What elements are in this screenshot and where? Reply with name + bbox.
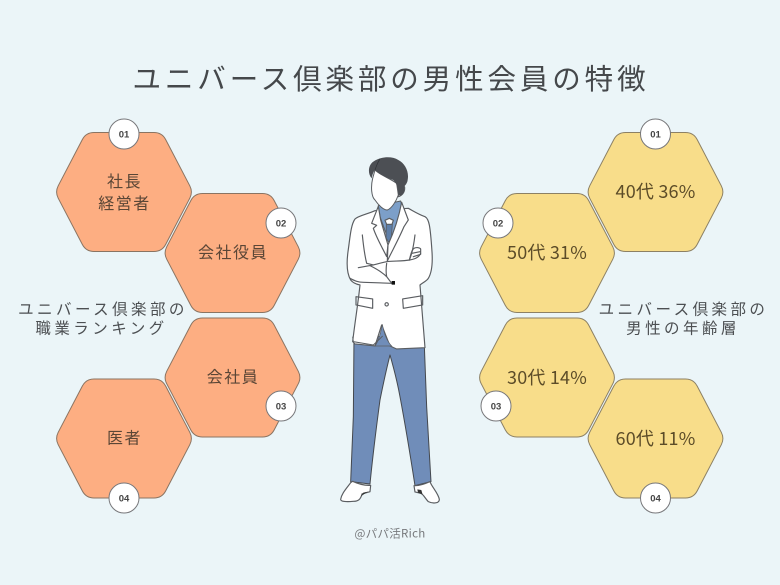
side label: age groups: 男性の年齢層 <box>626 320 740 338</box>
panel: occupation ranking <box>18 119 300 513</box>
badge 03: 03 <box>276 402 286 412</box>
hexagon 03: 30s <box>480 318 614 437</box>
hexagon 02: company officer <box>165 194 300 312</box>
badge 01: 01 <box>119 130 130 140</box>
hexagon 04: 60s: 60代 11% <box>616 425 695 451</box>
hexagon 02: company officer: 会社役員 <box>198 244 268 262</box>
hexagon 03: company employee: 会社員 <box>207 368 259 386</box>
hexagon 01: 40s <box>588 132 723 252</box>
hexagon 01: 40s: 40代 36% <box>616 178 695 204</box>
credit text: @パパ活Rich <box>354 526 426 542</box>
badge 04 <box>109 483 139 513</box>
trousers and shoes <box>341 337 439 503</box>
badge 02: 02 <box>276 218 286 230</box>
side label: occupation ranking: 職業ランキング <box>35 320 168 338</box>
hexagon 03: 30s: 30代 14% <box>507 364 587 390</box>
hexagon 01: president: 社長 <box>107 173 142 191</box>
side label: age groups <box>599 300 768 338</box>
badge 01: 01 <box>650 130 661 140</box>
badge 02 <box>483 208 513 238</box>
side label: occupation ranking: ユニバース倶楽部の <box>18 300 188 318</box>
badge 03 <box>266 391 296 421</box>
badge 03: 03 <box>491 402 501 412</box>
hexagon 02: 50s <box>480 194 614 312</box>
badge 03 <box>481 391 511 421</box>
badge 02: 02 <box>493 218 503 230</box>
badge 04: 04 <box>119 494 130 504</box>
badge 01 <box>109 119 139 149</box>
side label: occupation ranking <box>18 300 188 338</box>
hexagon 04: doctor: 医者 <box>107 430 142 448</box>
title: ユニバース倶楽部の男性会員の特徴 <box>133 64 649 96</box>
badge 02 <box>266 208 296 238</box>
panel: age groups <box>480 119 768 513</box>
badge 04: 04 <box>650 494 661 504</box>
hexagon 01: president <box>57 132 191 252</box>
jacket and head <box>347 157 432 349</box>
badge 01 <box>640 119 670 149</box>
hexagon 03: company employee <box>165 318 300 437</box>
hexagon 04: 60s <box>588 379 723 498</box>
illustration: man in white jacket <box>341 157 439 503</box>
hexagon 04: doctor <box>57 379 191 498</box>
side label: age groups: ユニバース倶楽部の <box>599 300 768 318</box>
jacket hem <box>353 336 383 345</box>
hexagon 02: 50s: 50代 31% <box>507 239 587 265</box>
hexagon 01: president: 経営者 <box>98 195 151 213</box>
badge 04 <box>640 483 670 513</box>
